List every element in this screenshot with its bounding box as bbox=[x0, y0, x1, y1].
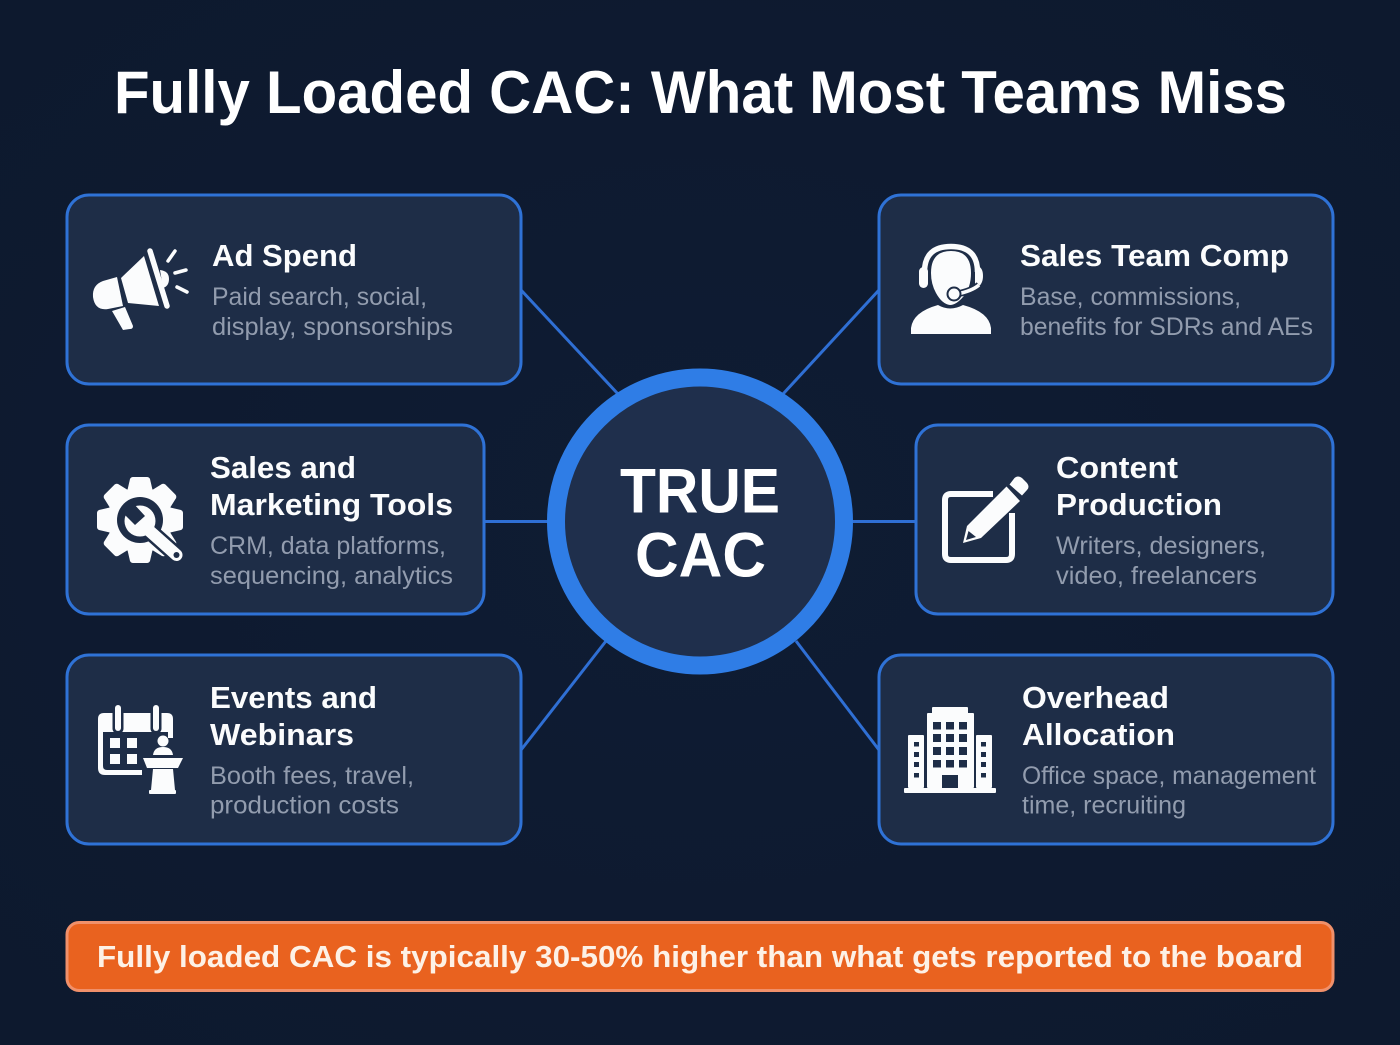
text: Ad Spend: Paid search, social, bbox=[212, 283, 427, 311]
text: Overhead Allocation: Overhead bbox=[1022, 680, 1169, 715]
icon: calendar and podium bbox=[98, 703, 183, 794]
text: Overhead Allocation: time, recruiting bbox=[1022, 792, 1186, 820]
icon: office building bbox=[904, 707, 996, 793]
central circle: TRUE CAC: TRUE bbox=[620, 456, 780, 526]
text: Sales Team Comp: benefits for SDRs and AEs bbox=[1020, 313, 1313, 341]
central circle: TRUE CAC: CAC bbox=[635, 520, 766, 590]
text: Sales and Marketing Tools: Sales and bbox=[210, 450, 356, 485]
icon: pencil on square bbox=[945, 476, 1028, 560]
text: Overhead Allocation: Office space, management bbox=[1022, 762, 1316, 790]
text: Sales and Marketing Tools: sequencing, analytics bbox=[210, 562, 453, 590]
callout banner bbox=[67, 922, 1333, 990]
panel: Events and Webinars bbox=[67, 655, 521, 844]
text: Overhead Allocation bbox=[1022, 680, 1316, 820]
text: Content Production: video, freelancers bbox=[1056, 562, 1257, 590]
text: Content Production bbox=[1056, 450, 1266, 590]
icon: headset agent bbox=[911, 246, 991, 334]
text: Events and Webinars: production costs bbox=[210, 792, 399, 820]
panel: Ad Spend bbox=[67, 195, 521, 384]
panel: Content Production bbox=[916, 425, 1333, 614]
text: Overhead Allocation: Allocation bbox=[1022, 717, 1175, 752]
text: Content Production: Production bbox=[1056, 487, 1222, 522]
text: Events and Webinars: Webinars bbox=[210, 717, 354, 752]
text: Sales Team Comp: Base, commissions, bbox=[1020, 283, 1241, 311]
panel: Sales and Marketing Tools bbox=[67, 425, 484, 614]
text: Sales and Marketing Tools: CRM, data platforms, bbox=[210, 532, 446, 560]
text: Ad Spend bbox=[212, 238, 453, 341]
central circle: TRUE CAC bbox=[556, 378, 844, 666]
title: Fully Loaded CAC: What Most Teams Miss bbox=[114, 59, 1287, 126]
icon: gear and wrench bbox=[97, 477, 183, 563]
text: Sales and Marketing Tools: Marketing Tools bbox=[210, 487, 453, 522]
text: Events and Webinars bbox=[210, 680, 414, 820]
text: Ad Spend: Ad Spend bbox=[212, 238, 357, 273]
text: Content Production: Content bbox=[1056, 450, 1178, 485]
text: Events and Webinars: Events and bbox=[210, 680, 377, 715]
text: Ad Spend: display, sponsorships bbox=[212, 313, 453, 341]
panel: Overhead Allocation bbox=[879, 655, 1333, 844]
callout banner: Fully loaded CAC is typically 30-50% higher than what gets reported to the board bbox=[97, 939, 1303, 974]
text: Sales and Marketing Tools bbox=[210, 450, 453, 590]
text: Sales Team Comp: Sales Team Comp bbox=[1020, 238, 1289, 273]
connector lines bbox=[484, 290, 916, 750]
panel: Sales Team Comp bbox=[879, 195, 1333, 384]
text: Events and Webinars: Booth fees, travel, bbox=[210, 762, 414, 790]
icon: megaphone bbox=[93, 251, 187, 330]
text: Content Production: Writers, designers, bbox=[1056, 532, 1266, 560]
text: Sales Team Comp bbox=[1020, 238, 1313, 341]
